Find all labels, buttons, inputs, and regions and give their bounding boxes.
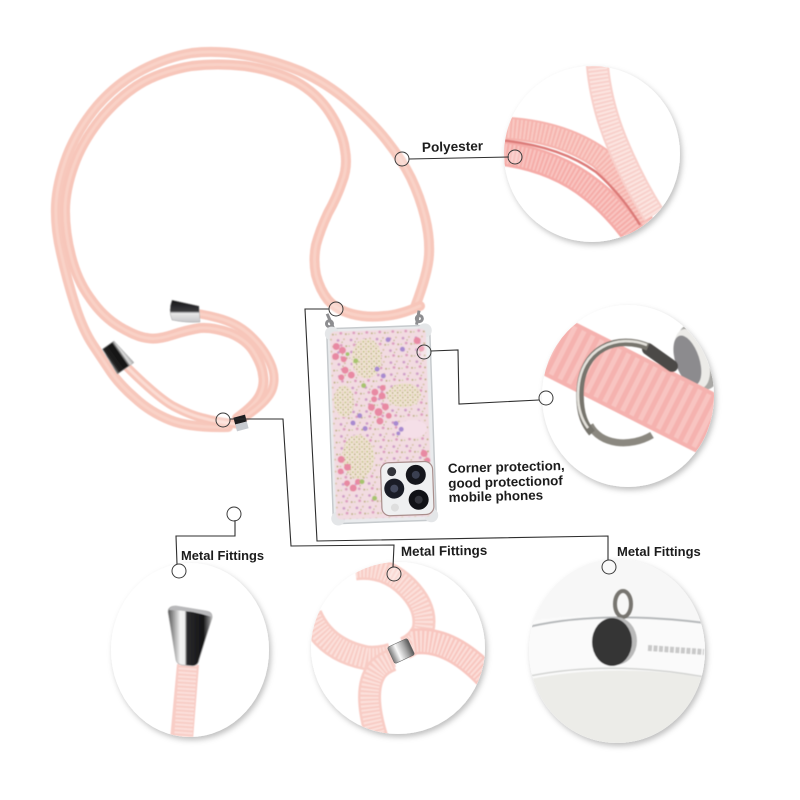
clear bumper [325,323,438,526]
metal link [648,349,672,366]
stopper fitting [233,415,249,431]
label: corner protection: mobile phones [448,488,543,505]
callout lines [176,157,608,567]
cord band [552,345,720,430]
ring lower arc behind cord [590,425,652,443]
camera module [380,461,434,516]
detail circle: metal disc on clear case [525,559,710,750]
detail circle: polyester weave [500,60,680,250]
attachment hardware [326,310,423,329]
label: corner protection: good protectionof [448,473,564,491]
lanyard cord [56,52,429,427]
phone case [324,310,438,526]
end cap: upper [170,300,200,322]
label: metal fittings left: Metal Fittings [181,548,264,563]
label: metal fittings right: Metal Fittings [617,544,701,559]
metal disc [672,326,714,390]
metal ring [580,342,648,433]
end cap: lower [101,339,134,374]
detail circle: ring attachment [542,305,727,487]
floral print [330,328,432,520]
label: polyester: Polyester [422,138,484,155]
label: metal fittings centre: Metal Fittings [401,543,487,559]
callout markers [172,150,616,581]
detail circle: sliding stopper [310,562,490,738]
label: corner protection: Corner protection, [448,458,565,476]
detail circle: end cap [111,563,269,740]
